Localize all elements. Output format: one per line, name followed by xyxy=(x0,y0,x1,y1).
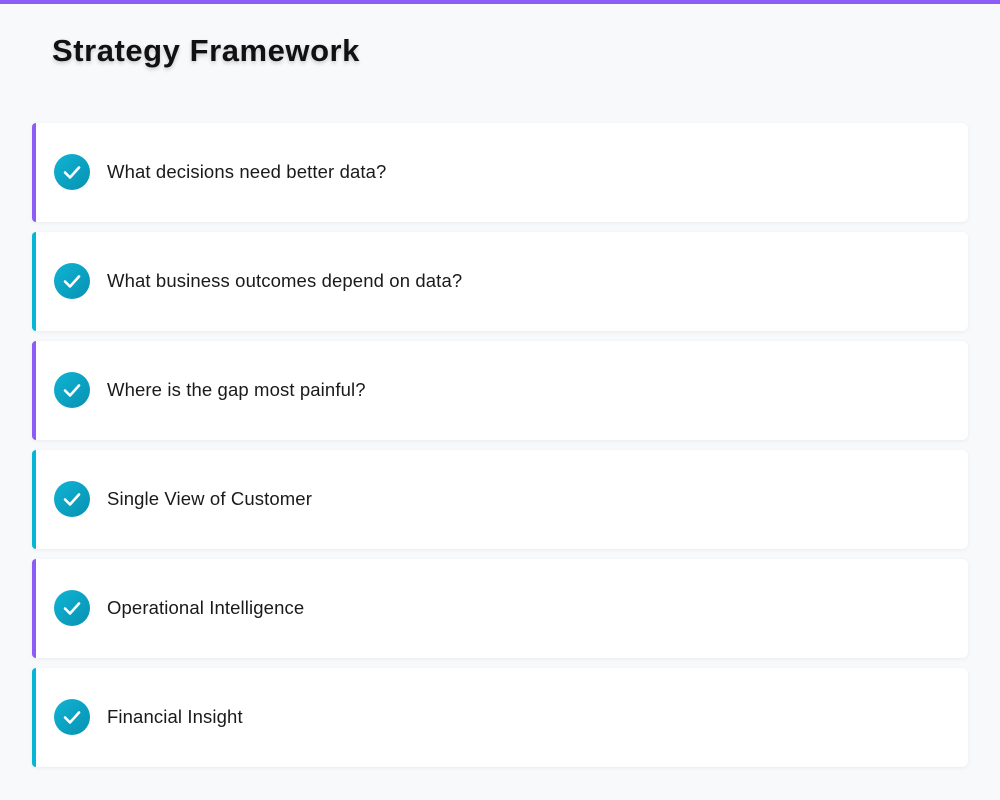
icon: check xyxy=(54,263,90,299)
icon: check xyxy=(54,699,90,735)
card 5 xyxy=(32,559,968,658)
card 1 xyxy=(32,123,968,222)
text: Financial Insight xyxy=(107,706,243,727)
icon: check xyxy=(54,590,90,626)
text: Where is the gap most painful? xyxy=(107,379,366,400)
text: Single View of Customer xyxy=(107,488,312,509)
text: What decisions need better data? xyxy=(107,161,386,182)
card 3 xyxy=(32,341,968,440)
card 4 xyxy=(32,450,968,549)
card 2 xyxy=(32,232,968,331)
icon: check xyxy=(54,481,90,517)
text: Operational Intelligence xyxy=(107,597,304,618)
title: Strategy Framework xyxy=(52,33,360,68)
card 6 xyxy=(32,668,968,767)
icon: check xyxy=(54,372,90,408)
text: What business outcomes depend on data? xyxy=(107,270,462,291)
icon: check xyxy=(54,154,90,190)
